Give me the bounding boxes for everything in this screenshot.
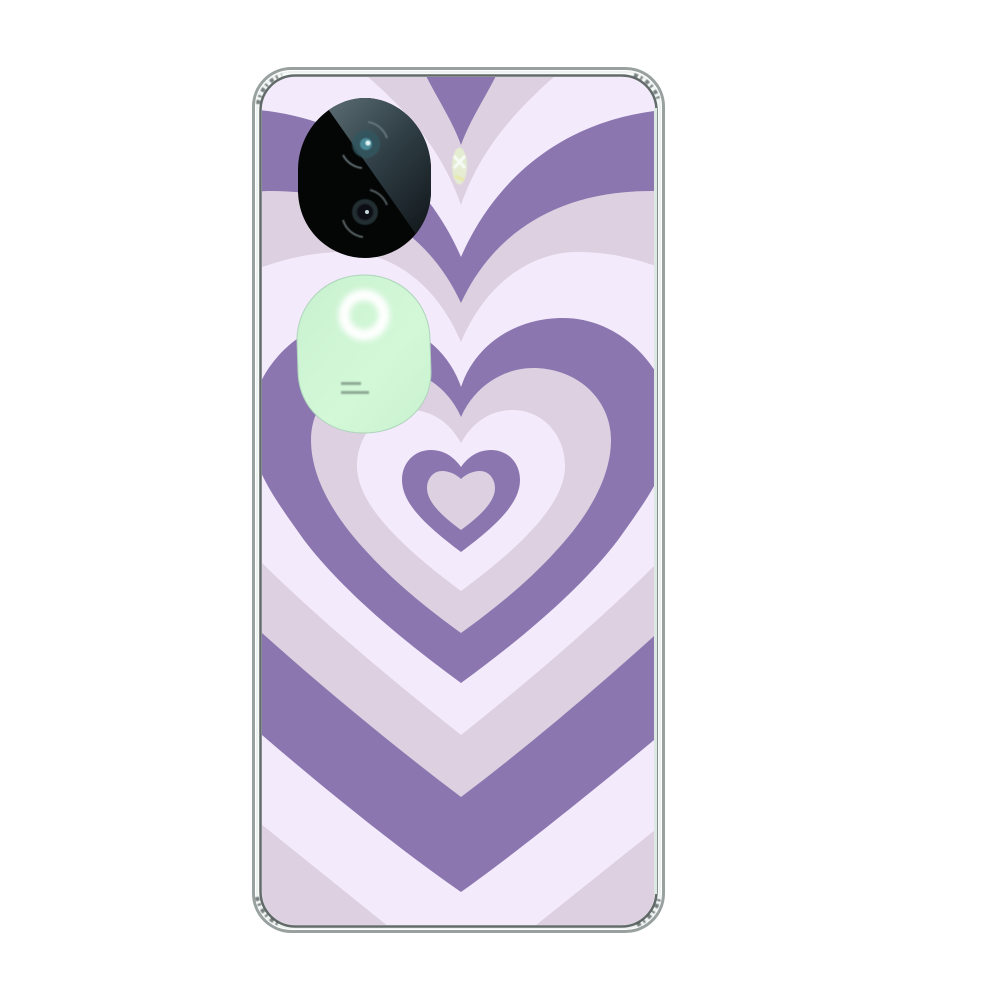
band: purple outer heart	[262, 110, 654, 892]
heart pattern back panel	[262, 77, 655, 925]
gem charm	[452, 148, 467, 184]
case corner grips	[257, 75, 659, 925]
heart: center mauve	[427, 471, 495, 530]
transparent case frame	[254, 68, 664, 932]
top purple wedge	[426, 77, 496, 145]
flash ring	[344, 295, 384, 335]
heart: light	[357, 410, 565, 591]
background: mauve corners	[255, 70, 660, 930]
green flash module	[297, 275, 431, 433]
upper lens	[343, 122, 387, 168]
phone case product illustration	[252, 67, 665, 933]
band: mauve heart	[262, 191, 654, 797]
band: light heart	[262, 252, 654, 735]
heart: small purple	[402, 450, 520, 552]
camera glass highlight	[329, 98, 431, 234]
camera module	[298, 98, 431, 258]
small printed label	[341, 382, 369, 394]
right inner case edge	[654, 108, 657, 894]
lower lens	[343, 190, 387, 237]
band: light outer heart	[262, 77, 655, 925]
heart: large purple	[250, 318, 672, 683]
heart: mauve	[311, 368, 611, 633]
